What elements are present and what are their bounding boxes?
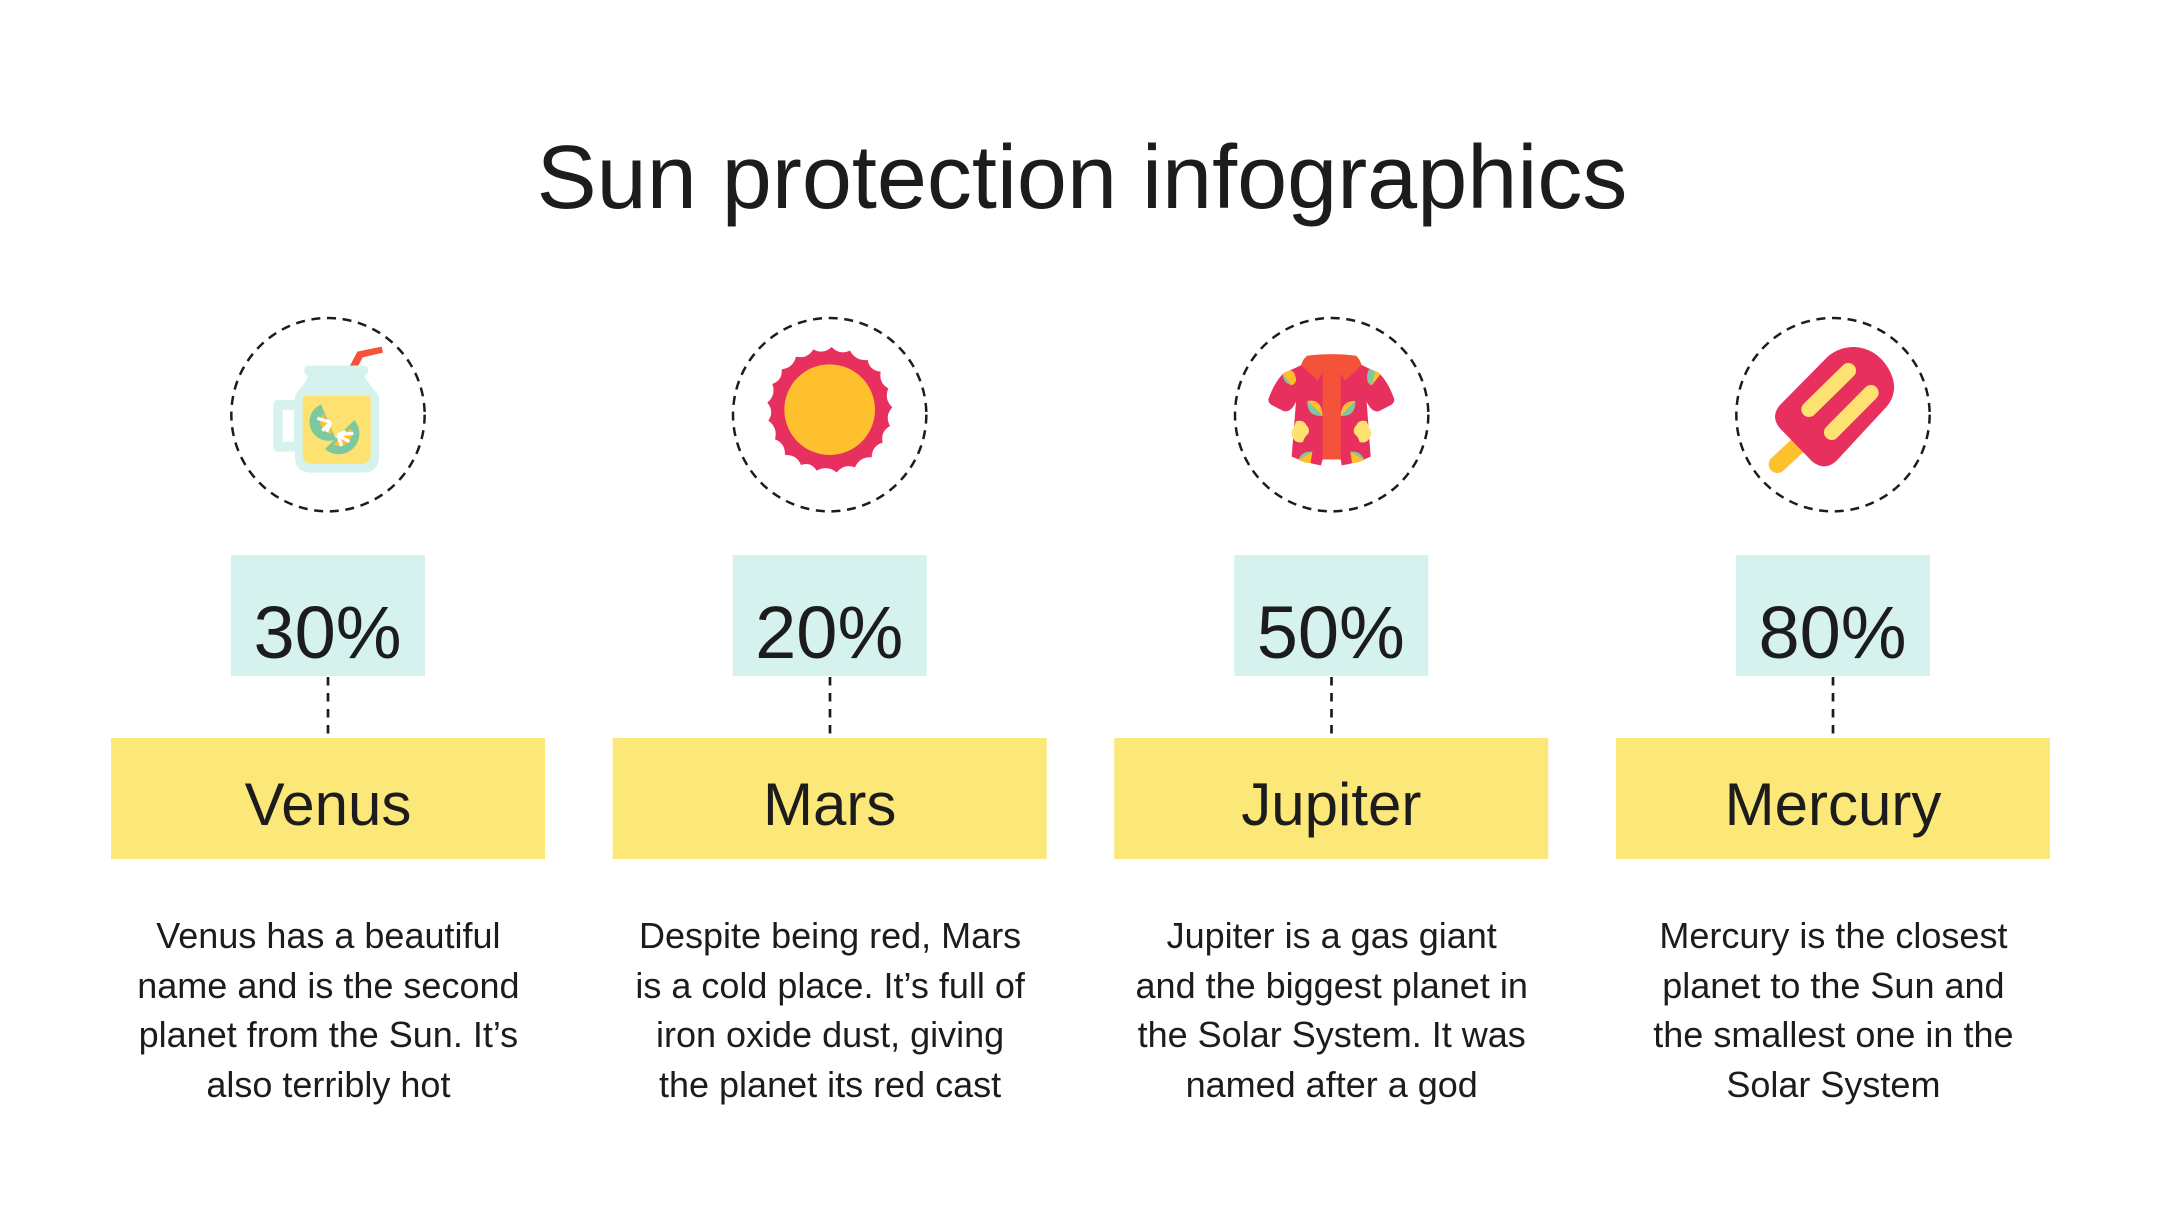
connector <box>1832 677 1834 734</box>
description: Mercury: Mercury is the closest <box>1659 915 2007 956</box>
name: Mars: Mars <box>763 771 896 838</box>
percentage: 20% <box>733 555 927 676</box>
description: Mercury: planet to the Sun and <box>1662 965 2005 1006</box>
description: Mars: iron oxide dust, giving <box>656 1014 1004 1055</box>
description: Jupiter: the Solar System. It was <box>1138 1014 1526 1055</box>
description: Venus: also terribly hot <box>206 1064 450 1105</box>
percentage: 50% <box>1234 555 1428 676</box>
description: Mars: Despite being red, Mars <box>639 915 1021 956</box>
icon: hawaiian shirt <box>1235 318 1428 511</box>
percentage: 30%: 30% <box>253 591 402 674</box>
description: Mars: the planet its red cast <box>659 1064 1001 1105</box>
name: Mars <box>613 738 1047 859</box>
description: Venus: planet from the Sun. It’s <box>139 1014 518 1055</box>
name: Mercury: Mercury <box>1725 771 1941 838</box>
icon: popsicle <box>1736 318 1930 511</box>
panel: Mercury <box>1616 318 2050 1105</box>
name: Mercury <box>1616 738 2050 859</box>
description: Venus: Venus has a beautiful <box>156 915 501 956</box>
percentage: 30% <box>231 555 425 676</box>
name: Venus: Venus <box>245 771 411 838</box>
icon: sun <box>733 318 926 511</box>
name: Jupiter: Jupiter <box>1241 771 1421 838</box>
title: Sun protection infographics <box>537 128 1627 228</box>
name: Venus <box>111 738 545 859</box>
percentage: 50%: 50% <box>1257 591 1405 674</box>
connector <box>1330 677 1333 734</box>
connector <box>829 677 831 734</box>
description: Mercury: the smallest one in the <box>1653 1014 2014 1055</box>
description: Jupiter: and the biggest planet in <box>1136 965 1528 1006</box>
description: Mercury: Solar System <box>1726 1064 1940 1105</box>
name: Jupiter <box>1114 738 1548 859</box>
percentage: 80% <box>1736 555 1930 676</box>
description: Venus: name and is the second <box>137 965 520 1006</box>
description: Jupiter: named after a god <box>1186 1064 1478 1105</box>
percentage: 80%: 80% <box>1758 591 1907 674</box>
panel: Mars <box>613 318 1047 1105</box>
description: Mars: is a cold place. It’s full of <box>635 965 1026 1006</box>
panel: Jupiter <box>1114 318 1548 1105</box>
connector <box>327 677 329 734</box>
panel: Venus <box>111 318 545 1105</box>
icon: lemonade jar <box>231 318 425 511</box>
description: Jupiter: Jupiter is a gas giant <box>1167 915 1497 956</box>
percentage: 20%: 20% <box>755 591 903 674</box>
